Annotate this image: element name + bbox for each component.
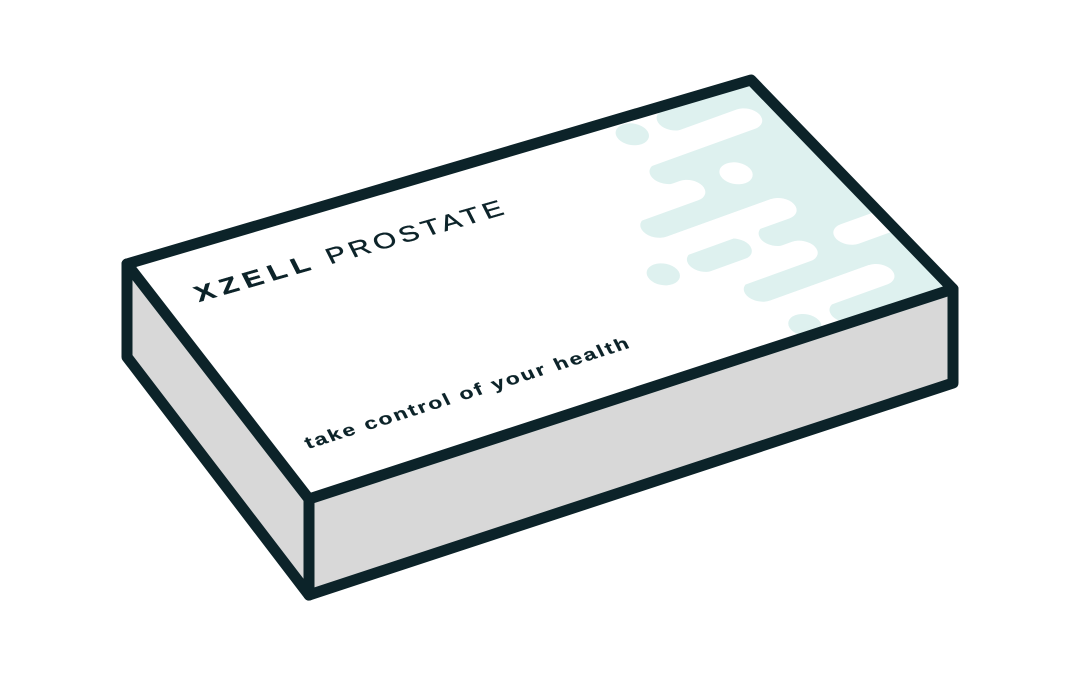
left side face of box [127,264,309,595]
teal pill pattern [616,86,943,334]
top face of box [127,80,953,499]
brand name: XZELL PROSTATE [190,194,512,307]
tagline: take control of your health [301,334,634,453]
front side face of box [309,289,953,595]
box outline [127,80,953,595]
product box illustration [122,74,958,601]
